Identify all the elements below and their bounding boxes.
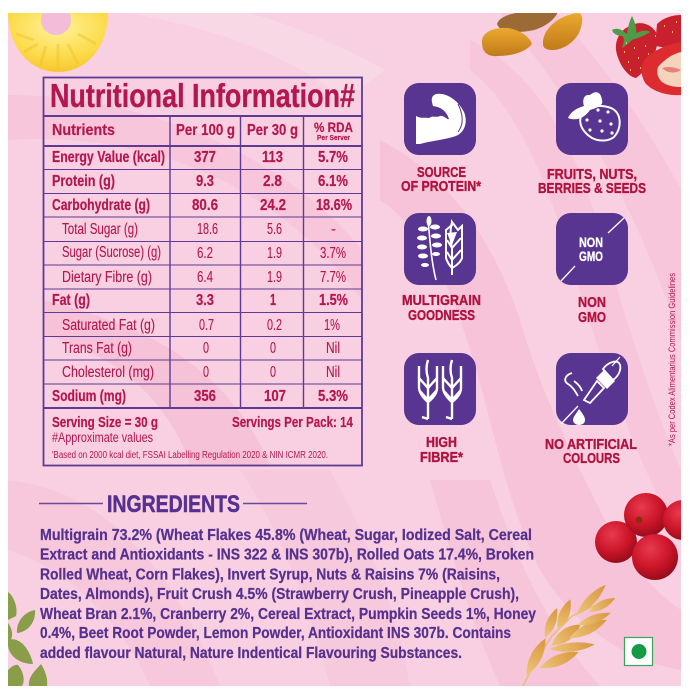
benefit: multigrain goodness — [402, 213, 481, 324]
table header row — [52, 119, 353, 142]
bold nutrient rows: Energy Value (kcal) — [52, 149, 165, 166]
regular nutrient rows: Dietary Fibre (g) — [62, 269, 152, 286]
bold nutrient rows — [52, 149, 352, 405]
bold nutrient rows: Sodium (mg) — [52, 388, 126, 405]
label: COLOURS — [563, 451, 620, 467]
bold nutrient rows: 1 — [270, 292, 276, 309]
label — [401, 165, 481, 195]
bold nutrient rows: 80.6 — [192, 197, 218, 214]
regular nutrient rows: 6.2 — [197, 245, 213, 262]
illustration: pineapple ring — [8, 13, 108, 72]
bold nutrient rows: 377 — [194, 149, 216, 166]
regular nutrient rows: 1% — [324, 317, 340, 334]
icon: non gmo badge — [556, 213, 628, 285]
illustration: oat sprig — [522, 582, 617, 686]
table header row: Per 100 g — [176, 122, 235, 139]
regular nutrient rows: 5.6 — [267, 221, 282, 238]
regular nutrient rows — [62, 221, 346, 381]
regular nutrient rows: Saturated Fat (g) — [62, 317, 155, 334]
table title: Nutritional Information# — [50, 77, 355, 114]
icon: oat and wheat — [404, 213, 476, 285]
label: FRUITS, NUTS, — [547, 167, 637, 183]
label: OF PROTEIN* — [401, 179, 481, 195]
label: BERRIES & SEEDS — [538, 181, 646, 197]
serving information and notes — [52, 414, 354, 461]
regular nutrient rows: Sugar (Sucrose) (g) — [62, 244, 161, 261]
table frame and grid — [43, 78, 362, 466]
label: GOODNESS — [408, 308, 475, 324]
bold nutrient rows: 5.7% — [318, 149, 348, 166]
regular nutrient rows: 0 — [270, 340, 276, 357]
ingredients text: Dates, Almonds), Fruit Crush 4.5% (Strawberry Crush, Pineapple Crush), — [40, 586, 519, 603]
ingredients text: Extract and Antioxidants - INS 322 & INS 307b), Rolled Oats 17.4%, Broken — [40, 546, 534, 564]
label — [402, 293, 481, 324]
bold nutrient rows: Carbohydrate (g) — [52, 197, 150, 214]
regular nutrient rows: - — [331, 221, 336, 238]
serving information and notes: Serving Size = 30 g — [52, 414, 158, 431]
regular nutrient rows: 1.9 — [267, 269, 282, 286]
regular nutrient rows: 3.7% — [320, 245, 346, 262]
benefit: no artificial colours — [545, 353, 637, 467]
icon: two wheat ears — [404, 353, 476, 425]
serving information and notes: #Approximate values — [52, 430, 153, 445]
icon: non gmo badge: GMO — [579, 249, 603, 264]
bold nutrient rows: 5.3% — [318, 388, 348, 405]
regular nutrient rows: 6.4 — [197, 269, 213, 286]
bold nutrient rows: 24.2 — [260, 197, 286, 214]
illustration: cranberries — [595, 493, 690, 580]
benefit: high fibre — [404, 353, 476, 466]
label: GMO — [578, 310, 606, 326]
bold nutrient rows: 107 — [264, 388, 286, 405]
benefit: source of protein — [401, 83, 481, 195]
bold nutrient rows: 113 — [262, 149, 283, 166]
table header row: Per Server — [317, 133, 350, 142]
regular nutrient rows: 0.7 — [199, 317, 214, 334]
table header row: Nutrients — [52, 122, 115, 139]
ingredients text: Rolled Wheat, Corn Flakes), Invert Syrup, Nuts & Raisins 7% (Raisins, — [40, 566, 500, 584]
bold nutrient rows: Fat (g) — [52, 292, 90, 309]
serving information and notes: 'Based on 2000 kcal diet, FSSAI Labelling Regulation 2020 & NIN ICMR 2020. — [52, 450, 328, 461]
benefit: fruits nuts berries seeds — [538, 83, 646, 197]
ingredients text: Multigrain 73.2% (Wheat Flakes 45.8% (Wheat, Sugar, Iodized Salt, Cereal — [40, 527, 532, 544]
regular nutrient rows: Cholesterol (mg) — [62, 364, 154, 381]
regular nutrient rows: 1.9 — [267, 245, 282, 262]
bold nutrient rows: Protein (g) — [52, 173, 115, 190]
benefit: non gmo — [556, 213, 628, 326]
icon: strawberry — [556, 83, 628, 155]
bold nutrient rows: 3.3 — [196, 292, 214, 309]
label — [538, 167, 646, 197]
label — [545, 437, 637, 467]
regular nutrient rows: 18.6 — [197, 221, 218, 238]
label: SOURCE — [417, 165, 466, 181]
regular nutrient rows: 0 — [203, 340, 209, 357]
ingredients text: Wheat Bran 2.1%, Cranberry 2%, Cereal Extract, Pumpkin Seeds 1%, Honey — [40, 606, 536, 623]
serving information and notes: Servings Per Pack: 14 — [232, 414, 354, 431]
bold nutrient rows: 18.6% — [316, 197, 352, 214]
label — [420, 435, 463, 466]
icon: non gmo badge: NON — [579, 235, 603, 250]
bold nutrient rows: 6.1% — [318, 173, 348, 190]
label: HIGH — [426, 435, 457, 451]
illustration: almonds — [482, 10, 582, 56]
ingredients heading: INGREDIENTS — [107, 491, 240, 518]
label: MULTIGRAIN — [402, 293, 481, 309]
illustration: strawberries — [612, 15, 681, 95]
illustration: pumpkin seeds — [8, 592, 47, 686]
label — [578, 295, 606, 326]
label: FIBRE* — [420, 450, 463, 466]
label: NO ARTIFICIAL — [545, 437, 637, 453]
regular nutrient rows: 0 — [270, 364, 276, 381]
regular nutrient rows: 0 — [203, 364, 209, 381]
regular nutrient rows: 7.7% — [320, 269, 346, 286]
bold nutrient rows: 1.5% — [319, 292, 348, 309]
table header row: % RDA — [314, 119, 353, 135]
label: NON — [578, 295, 606, 311]
bold nutrient rows: 356 — [194, 388, 216, 405]
bold nutrient rows: 9.3 — [196, 173, 214, 190]
regular nutrient rows: Nil — [326, 340, 340, 357]
ingredients text: added flavour Natural, Nature Indentical Flavouring Substances. — [40, 645, 462, 662]
regular nutrient rows: Trans Fat (g) — [62, 340, 132, 357]
icon: dropper — [556, 353, 628, 425]
footnote: vertical codex note: *As per Codex Alimentarius Commission Guidelines — [667, 273, 678, 446]
nutrition table — [43, 77, 362, 466]
ingredients text — [40, 527, 536, 662]
icon: vegetarian mark — [624, 638, 652, 666]
regular nutrient rows: Nil — [326, 364, 340, 381]
table header row: Per 30 g — [247, 122, 298, 139]
regular nutrient rows: Total Sugar (g) — [62, 221, 138, 238]
ingredients text: 0.4%, Beet Root Powder, Lemon Powder, Antioxidant INS 307b. Contains — [40, 625, 511, 642]
bold nutrient rows: 2.8 — [263, 173, 282, 190]
icon: flexed arm — [404, 83, 476, 155]
regular nutrient rows: 0.2 — [267, 317, 282, 334]
